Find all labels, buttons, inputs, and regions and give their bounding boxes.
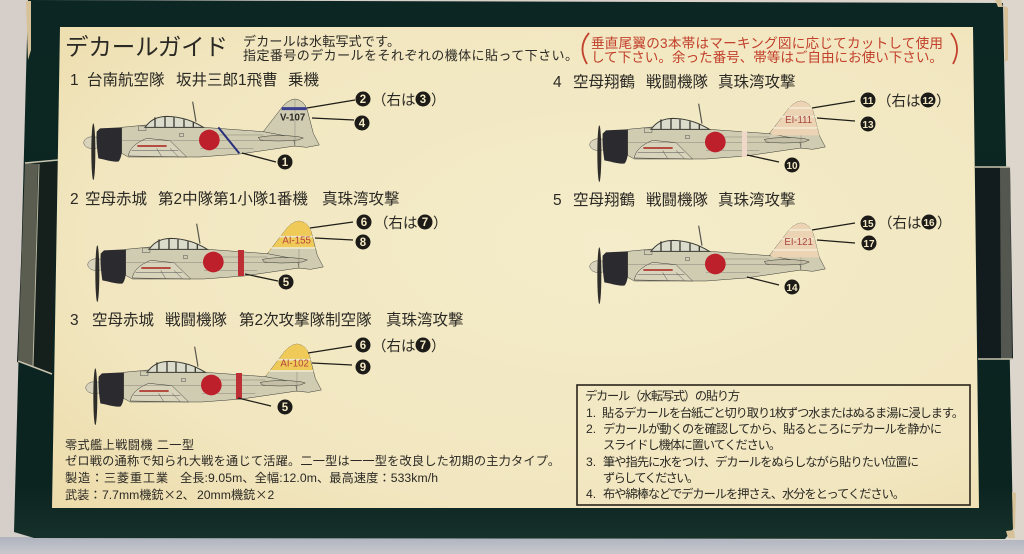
plane 5 leaders and numbers bbox=[747, 214, 952, 294]
aircraft 5 heading: 真珠湾攻撃 bbox=[718, 191, 796, 209]
aircraft specification text: 武装： bbox=[65, 488, 102, 502]
panel: how to apply decals bbox=[577, 385, 970, 505]
aircraft 1 diagram bbox=[84, 92, 446, 180]
table surface below box bbox=[0, 537, 1024, 554]
plane 5 drawing bbox=[590, 223, 825, 304]
plane 4 leaders and numbers: 13 bbox=[862, 120, 874, 131]
plane 4 leaders and numbers: ） bbox=[936, 93, 950, 110]
right torn flap bbox=[975, 167, 1013, 359]
panel: how to apply decals: 貼るデカールを台紙ごと切り取り1枚ずつ水またはぬるま湯に浸します。 bbox=[602, 405, 964, 420]
plane 3 leaders and numbers: （右は bbox=[372, 338, 416, 355]
red note: して下さい。余った番号、帯等はご自由にお使い下さい。 bbox=[591, 49, 943, 65]
plane 3 drawing bbox=[86, 344, 321, 425]
panel: cream instruction sheet bbox=[52, 27, 979, 508]
plane 4 leaders and numbers: 10 bbox=[786, 161, 798, 172]
plane 2 leaders and numbers: 8 bbox=[360, 237, 367, 249]
aircraft 4 heading: 戦闘機隊 bbox=[646, 73, 709, 91]
plane 2 drawing bbox=[88, 221, 323, 302]
aircraft specification text: ゼロ戦の通称で知られ大戦を通じて活躍。二一型は一一型を改良した初期の主力タイプ。 bbox=[65, 453, 560, 468]
plane 3 leaders and numbers: 5 bbox=[282, 402, 289, 414]
plane 4 leaders and numbers: 12 bbox=[922, 96, 934, 107]
aircraft 3 heading: 真珠湾攻撃 bbox=[386, 311, 464, 329]
plane 2 leaders and numbers: 6 bbox=[361, 217, 367, 229]
plane 1 drawing: V-107 bbox=[280, 112, 305, 123]
plane 3 drawing: AI-102 bbox=[280, 358, 309, 369]
plane 4 leaders and numbers: （右は bbox=[877, 93, 920, 110]
plane 3 leaders and numbers: 9 bbox=[360, 362, 366, 374]
panel: how to apply decals: デカールが動くのを確認してから、貼るところにデカールを静かに bbox=[603, 421, 942, 436]
aircraft 3 diagram bbox=[86, 338, 446, 425]
panel: how to apply decals: デカール（水転写式）の貼り方 bbox=[585, 388, 740, 403]
red note: 垂直尾翼の3本帯はマーキング図に応じてカットして使用 bbox=[591, 35, 943, 51]
plane 3 leaders and numbers: 6 bbox=[360, 340, 366, 352]
aircraft 4 heading: 4 bbox=[553, 74, 562, 91]
aircraft specification text: 7.7mm機銃 bbox=[102, 488, 164, 502]
plane 4 leaders and numbers: 11 bbox=[863, 96, 874, 107]
plane 2 leaders and numbers: （右は bbox=[374, 215, 418, 232]
panel: how to apply decals: 4. bbox=[586, 487, 596, 501]
plane 4 drawing: EI-111 bbox=[785, 115, 812, 126]
intro text: デカールは水転写式です。 bbox=[243, 34, 400, 49]
panel: how to apply decals: 3. bbox=[586, 455, 596, 469]
aircraft 4 heading: 真珠湾攻撃 bbox=[718, 73, 796, 91]
plane 2 leaders and numbers: 5 bbox=[283, 277, 290, 289]
plane 1 leaders and numbers: 1 bbox=[282, 157, 289, 169]
aircraft specification text: ×2、 bbox=[164, 485, 195, 503]
aircraft 3 heading: 3 bbox=[70, 312, 79, 329]
intro text bbox=[243, 34, 578, 63]
plane 1 leaders and numbers bbox=[242, 92, 446, 170]
plane 5 leaders and numbers: 17 bbox=[863, 239, 875, 250]
plane 3 leaders and numbers: ） bbox=[431, 338, 446, 355]
plane 1 leaders and numbers: 2 bbox=[360, 94, 366, 106]
plane 2 leaders and numbers: ） bbox=[433, 215, 448, 232]
panel: how to apply decals: 布や綿棒などでデカールを押さえ、水分をとってください。 bbox=[603, 486, 905, 501]
aircraft specification text: 製造：三菱重工業 bbox=[65, 471, 168, 485]
aircraft 3 heading: 戦闘機隊 bbox=[165, 311, 228, 329]
plane 2 leaders and numbers: 7 bbox=[422, 217, 428, 229]
plane 2 drawing: AI-155 bbox=[282, 235, 311, 246]
plane 5 leaders and numbers: 15 bbox=[862, 219, 874, 230]
aircraft 4 diagram bbox=[590, 92, 950, 182]
aircraft 5 heading: 空母翔鶴 bbox=[573, 191, 635, 209]
aircraft specification text: 零式艦上戦闘機 二一型 bbox=[65, 437, 194, 452]
aircraft 2 heading: 真珠湾攻撃 bbox=[322, 190, 400, 208]
panel: how to apply decals: スライドし機体に置いてください。 bbox=[603, 438, 781, 452]
plane 1 leaders and numbers: （右は bbox=[372, 92, 416, 109]
aircraft specification text bbox=[65, 437, 560, 503]
panel: how to apply decals: 筆や指先に水をつけ、デカールをぬらしながら貼りたい位置に bbox=[603, 454, 919, 469]
aircraft 2 heading: 2 bbox=[70, 191, 79, 208]
aircraft 5 heading: 戦闘機隊 bbox=[646, 191, 709, 209]
aircraft 3 heading: 第2次攻撃隊制空隊 bbox=[239, 311, 372, 329]
plane 2 leaders and numbers bbox=[245, 214, 448, 290]
plane 4 drawing bbox=[590, 101, 825, 182]
aircraft specification text: 全長:9.05m、全幅:12.0m、最高速度：533km/h bbox=[180, 470, 438, 485]
intro text: 指定番号のデカールをそれぞれの機体に貼って下さい。 bbox=[243, 48, 578, 63]
plane 1 leaders and numbers: ） bbox=[431, 92, 446, 109]
aircraft 1 heading: 坂井三郎1飛曹 bbox=[176, 71, 278, 89]
panel: how to apply decals: 2. bbox=[586, 422, 596, 436]
plane 5 leaders and numbers: 16 bbox=[923, 218, 935, 229]
aircraft 2 diagram bbox=[88, 214, 448, 302]
panel: how to apply decals: ずらしてください。 bbox=[603, 471, 699, 485]
plane 5 leaders and numbers: ） bbox=[937, 215, 952, 232]
plane 4 leaders and numbers bbox=[747, 92, 950, 172]
aircraft 1 heading: 台南航空隊 bbox=[87, 71, 165, 89]
aircraft specification text: ×2 bbox=[255, 485, 274, 503]
panel: how to apply decals: 1. bbox=[586, 406, 596, 420]
aircraft specification text: 20mm機銃 bbox=[197, 488, 255, 502]
plane 1 leaders and numbers: 3 bbox=[420, 94, 426, 106]
aircraft 1 heading: 乗機 bbox=[288, 71, 320, 89]
aircraft 5 heading: 5 bbox=[553, 192, 562, 209]
red note bbox=[582, 33, 957, 65]
plane 5 leaders and numbers: 14 bbox=[786, 283, 798, 294]
plane 5 leaders and numbers: （右は bbox=[878, 215, 922, 232]
aircraft 5 diagram bbox=[590, 214, 952, 304]
plane 1 drawing bbox=[84, 99, 319, 180]
aircraft 3 heading: 空母赤城 bbox=[92, 311, 155, 329]
plane 5 drawing: EI-121 bbox=[784, 237, 813, 248]
plane 1 leaders and numbers: 4 bbox=[359, 118, 366, 130]
aircraft 4 heading: 空母翔鶴 bbox=[573, 73, 635, 91]
aircraft 1 heading: 1 bbox=[70, 72, 79, 89]
left torn flap bbox=[17, 160, 58, 374]
plane 3 leaders and numbers: 7 bbox=[420, 340, 426, 352]
plane 3 leaders and numbers bbox=[238, 338, 446, 414]
aircraft 2 heading: 空母赤城 bbox=[85, 190, 148, 208]
aircraft 2 heading: 第2中隊第1小隊1番機 bbox=[158, 190, 308, 208]
title: デカールガイド bbox=[65, 34, 228, 60]
